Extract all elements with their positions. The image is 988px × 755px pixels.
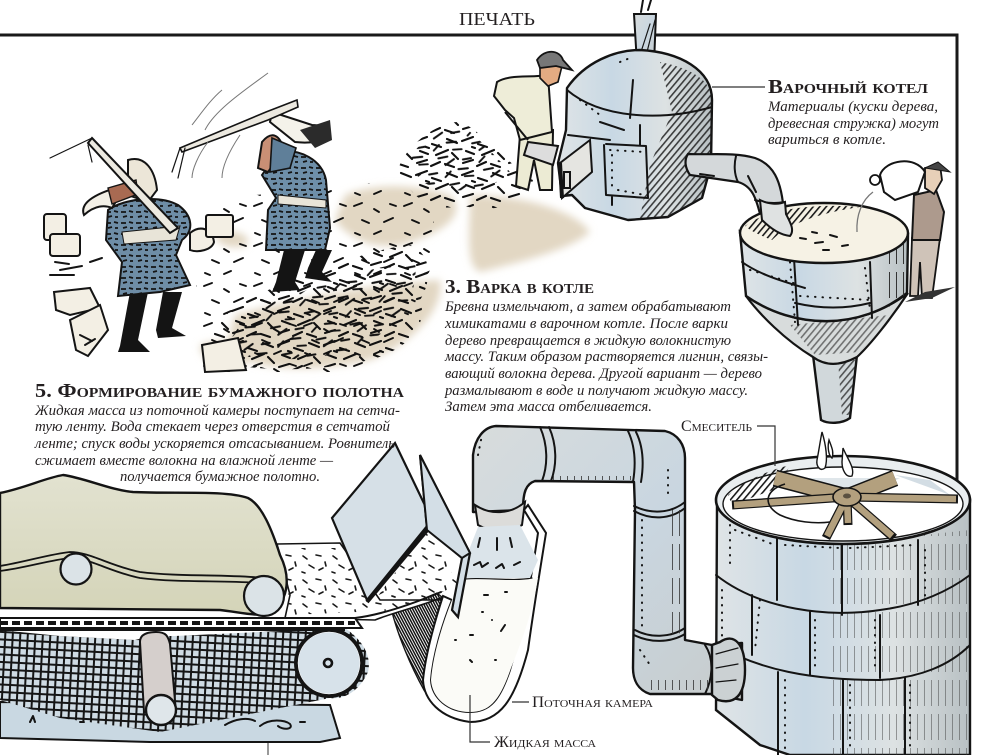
hatched shadow side: [640, 62, 712, 218]
torso: [912, 190, 944, 240]
funnel cone: [746, 293, 908, 364]
outlet pipe: [686, 154, 784, 215]
plate seams and rivets: [567, 80, 712, 205]
text: step 3 description: размалывают в воде и получают жидкую массу.: [444, 383, 748, 399]
tension roller: [146, 695, 176, 725]
worker with shovel: [494, 52, 572, 190]
text: step 5 description: Жидкая масса из поточной камеры поступает на сетча-: [34, 403, 400, 419]
white gap: [60, 630, 175, 640]
text: step 3 description: химикатами в варочном котле. После варки: [444, 316, 728, 332]
funnel vat: [740, 203, 908, 423]
text: step 3 description: вающий волокна дерева. Другой вариант — дерево: [445, 366, 762, 382]
label: liquid pulp: Жидкая масса: [494, 734, 596, 751]
lower chip pile: [205, 245, 428, 369]
inner belt loop: [0, 552, 265, 583]
felt belt: [0, 475, 287, 615]
vat rim and pulp: [740, 203, 908, 263]
text: boiler description: [767, 99, 939, 148]
scattered chips: [195, 183, 436, 372]
legs: [272, 250, 332, 292]
chamber liquid: [431, 578, 538, 712]
base tick: [267, 743, 269, 755]
ground wash: beige wood dust: [200, 186, 590, 368]
chimney: [634, 14, 656, 64]
falling liquid: [817, 432, 853, 476]
plate seams: [716, 535, 970, 755]
connector line: boiler label: [712, 86, 765, 88]
chip marks by the logs: [50, 258, 102, 345]
text: boiler description: Материалы (куски дерева,: [767, 99, 938, 115]
worker pouring: [857, 161, 955, 302]
label: mixer: [681, 418, 775, 466]
boiler illustration: [558, 0, 712, 220]
text: step 5 description: тую ленту. Вода стекает через отверстия в сетчатой: [35, 419, 390, 435]
axe: [88, 138, 178, 233]
hatched chamber back: [392, 593, 443, 690]
plate front: [332, 443, 432, 600]
legs: [118, 292, 186, 352]
leveller plates: [332, 443, 470, 617]
pipe shading: [552, 468, 710, 690]
lower chip pile, second layer: [222, 262, 416, 359]
boiler body: [558, 50, 712, 220]
roller upper: [60, 554, 92, 584]
illustration: two woodcutters and chips: [44, 73, 533, 372]
heading: boiler: Варочный котел: [768, 76, 929, 98]
vat seams: [742, 258, 872, 325]
label: flow chamber: Поточная камера: [532, 694, 653, 711]
text: step 3 description: [444, 299, 768, 415]
axe: [180, 100, 298, 152]
pipe flange to tank: [712, 639, 745, 701]
right side hatching: [830, 530, 970, 755]
tank interior: [716, 456, 970, 544]
S-shaped pipe: [473, 426, 745, 701]
head and hood: [128, 159, 157, 202]
raised arms: [270, 112, 329, 143]
liquid speckles: [455, 592, 507, 662]
label: liquid pulp: [470, 695, 596, 751]
vat wall: [740, 232, 908, 321]
chain strip: [0, 618, 362, 628]
plate back: [420, 455, 470, 617]
text: step 5 description: ленте; спуск воды ускоряется отсасыванием. Ровнитель: [34, 436, 396, 452]
text: step 5 description: сжимает вместе волокна на влажной ленте —: [35, 453, 333, 469]
wet paper sheet: [277, 543, 443, 620]
text: step 5 description: [34, 403, 400, 485]
tension rod: [140, 632, 176, 712]
sack: [880, 161, 925, 200]
pipe collars: [540, 427, 719, 694]
jacket: [262, 151, 330, 250]
legs: [910, 238, 940, 298]
press belt: [0, 475, 287, 616]
text: step 3 description: Затем эта масса отбеливается.: [445, 399, 652, 415]
ground shadow: [905, 287, 955, 302]
woodcutter right: [172, 100, 332, 292]
head: [925, 165, 942, 194]
rivets: [722, 525, 925, 750]
motion lines: [192, 73, 268, 178]
upper chip pile, second layer: [408, 125, 510, 190]
conveyor paper web: [277, 543, 443, 620]
text: boiler description: древесная стружка) могут: [768, 116, 939, 132]
head: [258, 135, 284, 172]
text: boiler description: вариться в котле.: [768, 132, 886, 148]
hatch door: [560, 140, 592, 198]
logs left: [44, 214, 246, 372]
chamber shell: [423, 505, 546, 722]
outlet pipe mouth over vat: [760, 200, 792, 236]
tank wall: [716, 500, 970, 755]
big pulley: [294, 628, 364, 698]
heading: step 3: 3. Варка в котле: [445, 276, 594, 298]
pipe body: [473, 426, 742, 700]
rivets on pipe: [478, 435, 668, 665]
woodcutter left: [50, 138, 190, 352]
text: step 5 description: получается бумажное полотно.: [120, 469, 320, 485]
jacket: [106, 199, 190, 296]
wire mesh conveyor: [0, 618, 369, 742]
torso and arms: [494, 75, 552, 140]
upper chip pile: [398, 122, 533, 209]
shovel: [505, 112, 558, 165]
pour stream: [857, 192, 873, 232]
label: mixer: Смеситель: [681, 418, 752, 435]
paper between plates: [375, 528, 458, 605]
flow chamber: [392, 505, 546, 722]
black rotation arrow: [768, 484, 830, 523]
spray from nozzle: [458, 525, 538, 578]
mixer blades: [732, 478, 958, 538]
legs: [516, 130, 553, 190]
pipe joints: [700, 156, 784, 203]
text: step 3 description: дерево превращается в жидкую волокнистую: [445, 333, 731, 349]
sheet edge band: [355, 592, 441, 618]
head: [540, 66, 562, 86]
section title: ПЕЧАТЬ: [459, 9, 535, 29]
base plate: [0, 702, 340, 742]
mesh belt: [0, 628, 369, 732]
heading: step 5: 5. Формирование бумажного полотна: [35, 380, 405, 402]
text: step 3 description: Бревна измельчают, а затем обрабатывают: [444, 299, 731, 315]
cap: [537, 52, 572, 70]
funnel spout: [813, 355, 857, 423]
mixer tank: [716, 456, 970, 755]
nozzle: [475, 502, 525, 530]
text: step 3 description: массу. Таким образом растворяется лигнин, связы-: [444, 349, 768, 365]
roller front: [244, 576, 284, 616]
